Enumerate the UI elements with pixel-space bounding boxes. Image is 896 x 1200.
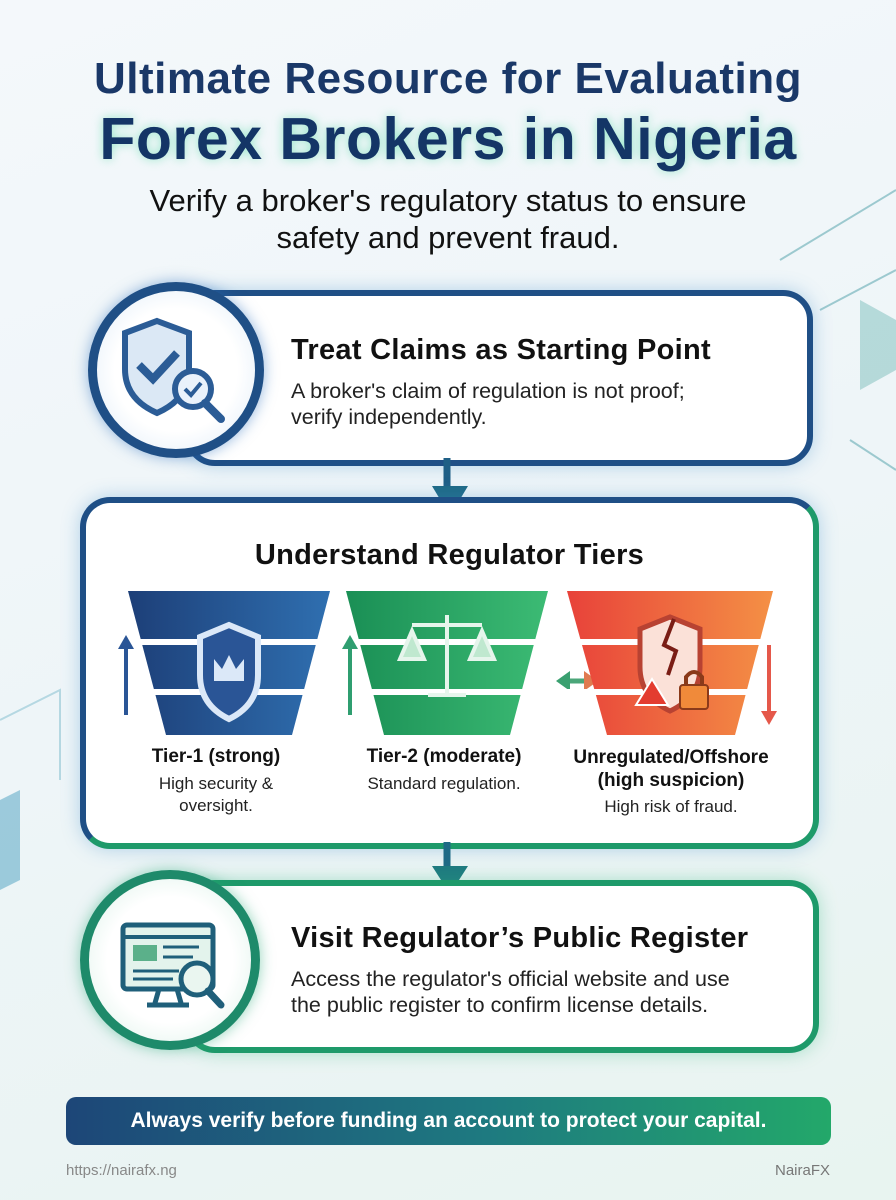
tier 3 label: (high suspicion) [598, 770, 744, 791]
tier 2 funnel [340, 591, 598, 735]
title [94, 54, 802, 178]
subtitle: Verify a broker's regulatory status to ensure [150, 183, 746, 218]
text 1: verify independently. [291, 405, 487, 429]
tier 3 label: Unregulated/Offshore [573, 747, 769, 768]
title: Ultimate Resource for Evaluating [94, 54, 802, 103]
tier 3 label [573, 747, 769, 816]
text 3: Access the regulator's official website and use [291, 967, 730, 991]
tier 1 label: oversight. [179, 796, 253, 815]
card 2: regulator tiers [80, 497, 819, 849]
card 1: treat claims [185, 290, 813, 466]
tier 1 label: Tier-1 (strong) [152, 746, 280, 767]
heading 3: Visit Regulator’s Public Register [291, 922, 748, 954]
subtitle [150, 183, 746, 255]
tier 2 label: Tier-2 (moderate) [367, 746, 521, 767]
tier 2 label: Standard regulation. [367, 774, 521, 793]
tier 1 label [152, 746, 280, 815]
subtitle: safety and prevent fraud. [277, 220, 619, 255]
text 1 [291, 379, 685, 429]
tier 1 funnel [118, 591, 340, 735]
bottom banner: Always verify before funding an account to protect your capital. [131, 1109, 766, 1132]
tier 1 label: High security & [159, 774, 273, 793]
card 3: public register [185, 880, 819, 1053]
heading 1: Treat Claims as Starting Point [291, 334, 711, 366]
footer brand: NairaFX [775, 1162, 830, 1179]
text 3: the public register to confirm license details. [291, 993, 708, 1017]
icon: monitor with magnifier [80, 870, 260, 1050]
tier 2 label [366, 746, 521, 793]
arrow 2 [432, 842, 468, 880]
tier 3 funnel [560, 591, 780, 735]
title: Forex Brokers in Nigeria [99, 106, 797, 172]
text 3 [291, 967, 730, 1017]
icon: shield with magnifier [88, 282, 264, 458]
arrow 1 [432, 458, 468, 497]
tier 3 label: High risk of fraud. [604, 797, 738, 816]
heading 2: Understand Regulator Tiers [255, 539, 644, 571]
footer url: https://nairafx.ng [66, 1162, 177, 1179]
bottom banner [66, 1097, 831, 1145]
tier graphics [118, 591, 777, 735]
text 1: A broker's claim of regulation is not proof; [291, 379, 685, 403]
